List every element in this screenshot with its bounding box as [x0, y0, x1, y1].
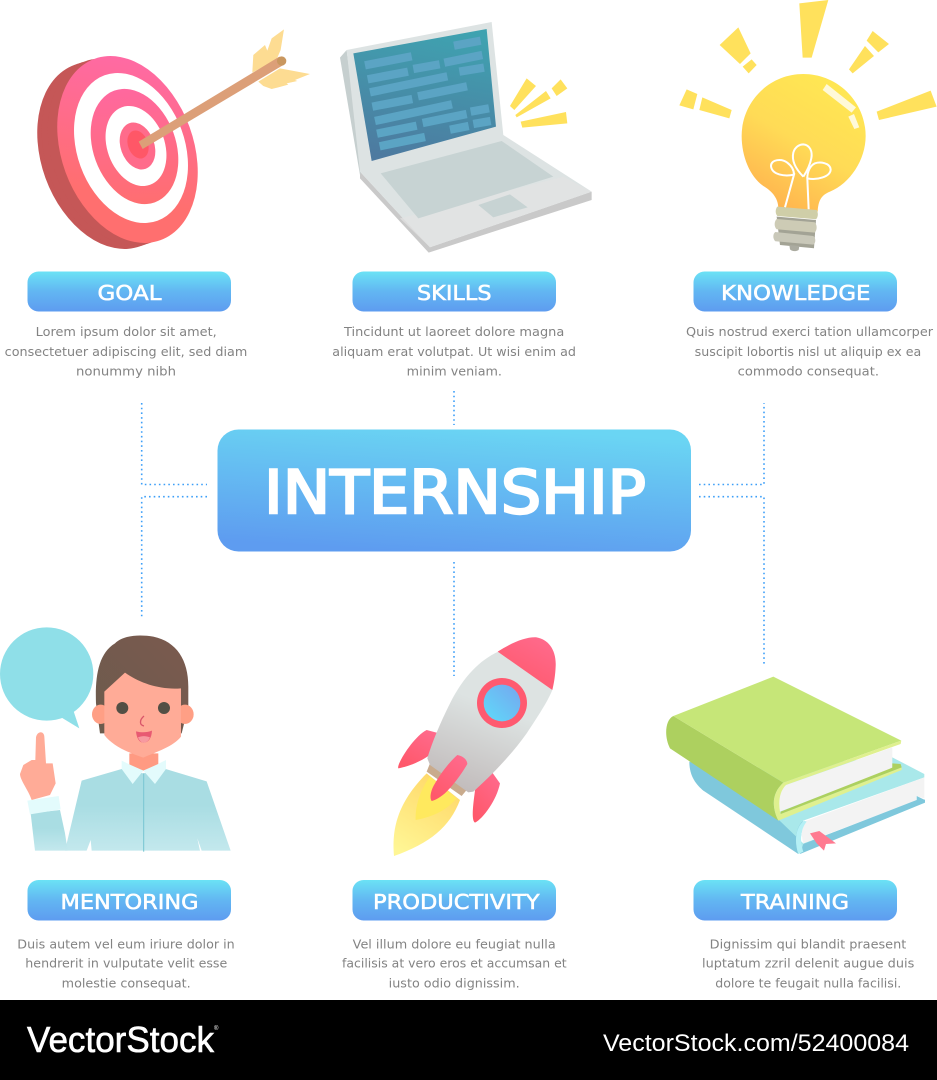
text: productivity description: Vel illum dolore eu feugiat nulla — [353, 936, 556, 951]
text: skills description: minim veniam. — [407, 364, 502, 378]
label: goal: GOAL — [98, 281, 162, 305]
central title box: internship — [218, 430, 691, 552]
connector: left dotted lines — [142, 403, 207, 618]
text: knowledge description: suscipit lobortis nisl ut aliquip ex ea — [695, 344, 921, 359]
label: knowledge: KNOWLEDGE — [721, 281, 870, 305]
connector: centre dotted lines — [453, 391, 455, 676]
footer bar: watermark — [0, 1000, 937, 1080]
text: mentoring description: molestie consequat. — [62, 975, 191, 990]
text: goal description — [5, 324, 247, 378]
text: mentoring description: hendrerit in vulputate velit esse — [25, 956, 228, 971]
label: mentoring: MENTORING — [60, 890, 198, 914]
text: productivity description: iusto odio dignissim. — [389, 975, 520, 990]
label: training — [694, 880, 897, 920]
icon: rocket — [393, 637, 556, 856]
text: knowledge description: commodo consequat. — [738, 364, 879, 378]
text: training description: dolore te feugait nulla facilisi. — [715, 975, 901, 990]
icon: light bulb — [679, 0, 937, 251]
text: mentoring description: Duis autem vel eum iriure dolor in — [17, 936, 235, 951]
icon: stacked books — [666, 677, 925, 854]
label: productivity: PRODUCTIVITY — [373, 890, 540, 914]
connector: right dotted lines — [699, 403, 764, 664]
label: mentoring — [28, 880, 231, 920]
text: training description — [702, 936, 914, 990]
icon: laptop — [340, 22, 592, 253]
text: goal description: Lorem ipsum dolor sit amet, — [36, 324, 217, 339]
central title box: internship: INTERNSHIP — [264, 458, 646, 528]
text: training description: luptatum zzril delenit augue duis — [702, 956, 914, 971]
icon: mentor with speech bubble — [0, 627, 231, 852]
icon: target with arrow — [12, 29, 310, 269]
footer bar: watermark: VectorStock.com/52400084 — [603, 1030, 909, 1057]
text: training description: Dignissim qui blandit praesent — [710, 936, 906, 951]
text: skills description: aliquam erat volutpat. Ut wisi enim ad — [332, 344, 576, 359]
text: knowledge description: Quis nostrud exerci tation ullamcorper — [686, 324, 934, 339]
label: skills — [352, 272, 556, 312]
text: goal description: nonummy nibh — [76, 364, 176, 378]
text: productivity description — [342, 936, 567, 990]
text: goal description: consectetuer adipiscing elit, sed diam — [5, 344, 247, 359]
label: knowledge — [694, 272, 897, 312]
text: knowledge description — [686, 324, 934, 378]
footer bar: watermark: VectorStock — [27, 1019, 215, 1060]
text: skills description — [332, 324, 576, 378]
label: productivity — [352, 880, 556, 920]
label: training: TRAINING — [740, 890, 849, 914]
label: goal — [28, 272, 231, 312]
text: skills description: Tincidunt ut laoreet dolore magna — [343, 324, 564, 339]
text: productivity description: facilisis at vero eros et accumsan et — [342, 956, 567, 971]
text: mentoring description — [17, 936, 235, 990]
label: skills: SKILLS — [417, 281, 492, 305]
footer bar: watermark: ® — [214, 1025, 219, 1032]
